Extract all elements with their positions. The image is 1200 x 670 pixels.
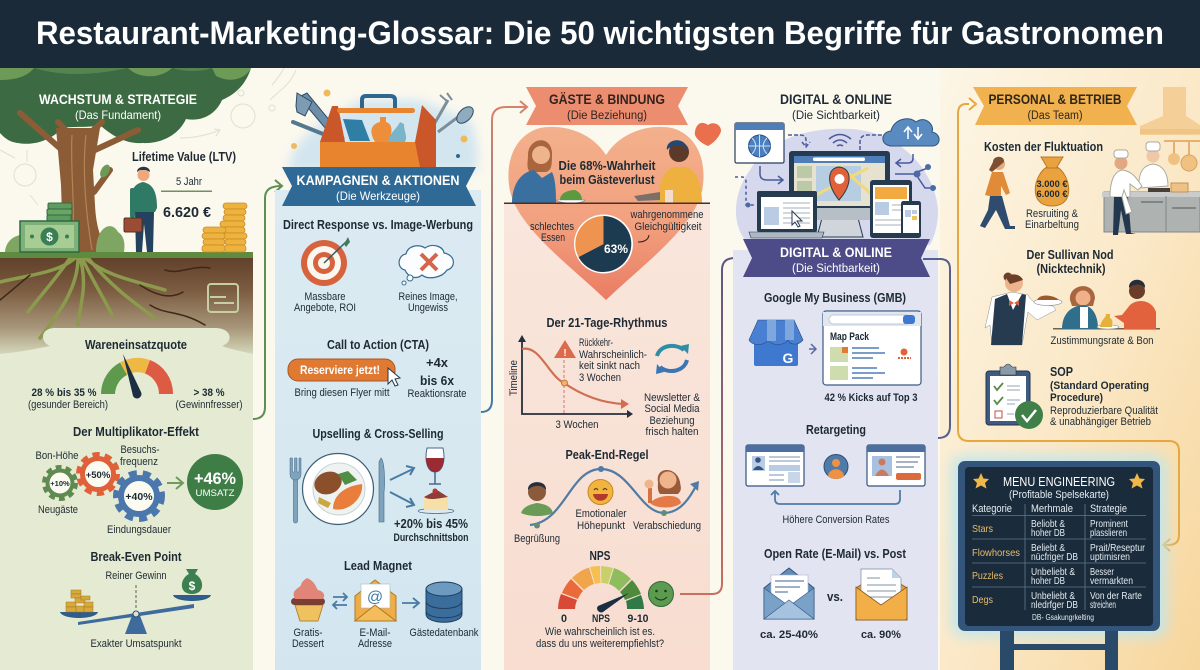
labels: gears: Neugäste [38, 504, 78, 516]
table header: Strategie [1090, 503, 1127, 515]
sign inner board [965, 467, 1153, 626]
heading: Direct Response: Direct Response vs. Image-Werbung [283, 217, 473, 232]
ground strip [0, 252, 253, 258]
heading: 21-Tage-Rhythmus: Der 21-Tage-Rhythmus [546, 315, 668, 330]
heading: Retargeting: Retargeting [806, 422, 866, 437]
text: newsletter: frisch halten [646, 426, 698, 438]
labels: Lead Magnet: E-Mail- [360, 627, 391, 639]
sign heading [1003, 474, 1115, 501]
arrow: Personal to Menu Engineering [958, 98, 1179, 551]
label: Reiner Gewinn: Reiner Gewinn [106, 570, 166, 582]
heading: Open Rate: Open Rate (E-Mail) vs. Post [764, 546, 907, 561]
row: Dogs: Von der Rarte [1090, 590, 1142, 602]
button: Reserviere jetzt: Reserviere jetzt! [300, 365, 380, 377]
stat: average check: +20% bis 45% [394, 516, 468, 531]
labels: Direct Response: Ungewiss [408, 302, 448, 314]
gear green: +10% [50, 479, 70, 488]
stat: reaction rate [408, 355, 466, 400]
text: recruiting: Resruiting & [1026, 208, 1079, 220]
icon: banknote stack [20, 203, 79, 252]
labels: peak end: Emotionaler [576, 508, 627, 520]
text: vs: vs. [827, 589, 843, 604]
heading: 68 percent truth: beim Gästeverlust [560, 172, 655, 187]
labels: NPS: dass du uns weiterempfiehlst? [536, 638, 664, 650]
heading: Sullivan Nod [1026, 247, 1114, 276]
text: return probability: Wahrscheinlich- [579, 349, 647, 361]
icon: browser globe [735, 123, 784, 163]
row: Puzzles: Puzzles [972, 570, 1003, 582]
arrow: Wachstum to Kampagnen [253, 180, 282, 419]
table header: Merhmale [1031, 503, 1073, 515]
banner: Gaeste [526, 87, 688, 125]
badge: plus 46 percent: UMSATZ [196, 488, 235, 499]
labels: pie chart [530, 209, 704, 244]
icon: recycling badge in soil [208, 284, 238, 312]
illustration: waiter with plate [985, 272, 1062, 345]
labels: NPS: 0 [561, 613, 567, 625]
row: Flowhorses [972, 542, 1145, 563]
labels: gears: Bon-Höhe [36, 450, 78, 462]
labels: gears: Besuchs- [120, 444, 160, 456]
table: menu matrix [972, 503, 1146, 611]
banner: Digital: (Die Sichtbarkeit) [792, 263, 880, 275]
text: SOP [1050, 364, 1158, 428]
icon: guest with briefcase [124, 167, 157, 252]
arrow: retargeting loop [771, 490, 900, 504]
warm background for team column [940, 68, 1200, 670]
text: Lifetime Value [132, 149, 236, 221]
banner: Personal: (Das Team) [1028, 110, 1083, 122]
banner: Kampagnen: (Die Werkzeuge) [336, 189, 420, 203]
labels: Lead Magnet: Gratis- [294, 627, 323, 639]
icon: balance scale [60, 569, 211, 634]
icon: email envelope: @ [367, 589, 383, 606]
labels: Wareneinsatzquote ranges: > 38 % [194, 387, 225, 399]
sign footnote: DB- Gsakungrkelting [1032, 613, 1094, 622]
labels: Lead Magnet [292, 627, 479, 650]
button: Reserviere jetzt [288, 359, 395, 381]
sign posts [1000, 631, 1118, 670]
icon: cupcake [291, 578, 325, 621]
labels: gears: Eindungsdauer [107, 524, 171, 536]
text: newsletter: Beziehung [650, 415, 694, 427]
banner: Gaeste: (Die Beziehung) [567, 110, 647, 122]
panel: Personal und Betrieb [973, 87, 1200, 429]
banner: Gaeste: GÄSTE & BINDUNG [549, 92, 665, 107]
gear blue: +40% [125, 491, 153, 503]
stat: reaction rate: Reaktionsrate [408, 388, 466, 400]
row: Flowhorses: Flowhorses [972, 547, 1020, 559]
text: Lifetime Value: Lifetime Value (LTV) [132, 149, 236, 164]
tree trunk [52, 128, 113, 254]
icon: laptop [749, 191, 824, 238]
trunk highlight lines [72, 135, 92, 250]
text: recruiting: Einarbeltung [1025, 219, 1079, 231]
arrow: to database [402, 598, 419, 608]
panel background [0, 345, 253, 670]
illustration: greeted guest [521, 482, 553, 516]
row: Dogs: nledrfger DB [1031, 599, 1078, 611]
text: newsletter [644, 392, 701, 438]
icon: cursor [388, 368, 400, 386]
row: Flowhorses: Prait/Reseptur [1090, 542, 1145, 554]
heading: Lead Magnet: Lead Magnet [344, 558, 413, 573]
icon: balance scale: $ [189, 579, 196, 593]
heading: 68 percent truth: Die 68%-Wahrheit [558, 158, 656, 173]
text: SOP: (Standard Operating [1050, 380, 1149, 392]
text: return probability: 3 Wochen [579, 372, 621, 384]
icon: green smiley [648, 582, 674, 606]
labels: peak end: Höhepunkt [577, 520, 625, 532]
table header: Kategorie [972, 503, 1012, 515]
sign glow [952, 456, 1166, 636]
labels: NPS: Wie wahrscheinlich ist es. [545, 626, 655, 638]
banner: Kampagnen: KAMPAGNEN & AKTIONEN [296, 172, 460, 188]
labels: Direct Response [294, 291, 458, 314]
labels: Direct Response: Angebote, ROI [294, 302, 356, 314]
illustration: woman at table [512, 140, 585, 203]
leaf on branch [98, 163, 112, 179]
labels: Direct Response: Reines Image, [398, 291, 458, 303]
banner: Personal: PERSONAL & BETRIEB [988, 92, 1122, 107]
badge: plus 46 percent: +46% [194, 469, 236, 488]
labels: open rates: ca. 90% [861, 629, 901, 641]
icon: banknote stack: $ [46, 230, 53, 244]
labels: pie chart: Essen [541, 232, 565, 244]
icon: database [426, 582, 462, 622]
network lines and wifi [735, 134, 935, 205]
heading: Call to Action: Call to Action (CTA) [327, 337, 429, 352]
icon: browser left [746, 445, 804, 486]
row: Stars: hoher DB [1031, 527, 1065, 539]
icon: blue envelope [764, 568, 814, 619]
title bar [0, 0, 1200, 68]
illustration: guests at table [1053, 280, 1160, 330]
row: Puzzles: Unbeliebt & [1031, 566, 1075, 578]
heading: Multiplikator-Effekt: Der Multiplikator-Effekt [73, 424, 200, 439]
icon: target [301, 237, 350, 286]
panel background [275, 190, 481, 670]
text: SOP: SOP [1050, 364, 1073, 379]
row: Dogs [972, 590, 1142, 611]
gauge: Wareneinsatzquote [101, 354, 173, 398]
labels: Lead Magnet: Adresse [358, 638, 392, 650]
icon: kitchen hood [1140, 87, 1200, 135]
pie chart [574, 214, 633, 274]
row: Flowhorses: uptimisren [1090, 551, 1130, 563]
text: newsletter: Newsletter & [644, 392, 701, 404]
row: Dogs: Degs [972, 594, 993, 606]
table header [972, 503, 1127, 515]
icon: money bag: 6.000 € [1036, 189, 1068, 199]
labels: open rates: ca. 25-40% [760, 629, 818, 641]
sign heading: (Profitable Spelsekarte) [1009, 489, 1109, 501]
labels: Wareneinsatzquote ranges: (Gewinnfresser) [176, 399, 242, 411]
icon: toolbox [291, 90, 476, 167]
labels: Wareneinsatzquote ranges [28, 387, 242, 411]
badge: plus 46 percent [187, 454, 243, 510]
heading: Fluktuation: Kosten der Fluktuation [984, 139, 1103, 154]
labels: Lead Magnet: Dessert [292, 638, 324, 650]
pie chart: 63% [604, 244, 628, 256]
text: SOP: Procedure) [1050, 392, 1103, 404]
row: Puzzles: hoher DB [1031, 575, 1065, 587]
icon: cloud sync [883, 119, 939, 146]
labels: NPS: 9-10 [628, 613, 648, 625]
text: recruiting [1025, 208, 1079, 231]
label: conversion: Höhere Conversion Rates [782, 514, 890, 526]
arrow: Kampagnen to Gaeste [481, 101, 527, 412]
card: Map Pack: Map Pack [830, 331, 870, 343]
text: newsletter: Social Media [644, 403, 700, 415]
heading blob: Wareneinsatzquote: Wareneinsatzquote [85, 337, 187, 352]
icon: tablet and phone [870, 180, 921, 238]
icon: orange envelope with letter [856, 569, 907, 620]
icon: plate with cutlery [290, 454, 385, 524]
heading: GMB: Google My Business (GMB) [764, 290, 906, 305]
illustration: leaving employee [980, 157, 1015, 229]
labels: peak end: Begrüßung [514, 533, 560, 545]
stat: reaction rate: +4x [426, 355, 449, 370]
labels: open rates [760, 629, 901, 641]
section heading: WACHSTUM & STRATEGIE [39, 91, 197, 107]
text: return probability [579, 337, 647, 384]
text: Lifetime Value: 6.620 € [163, 204, 212, 221]
chart: 21 day curve: ! [563, 348, 567, 359]
row: Dogs: streichen [1090, 599, 1116, 611]
heading: Upselling: Upselling & Cross-Selling [312, 426, 444, 441]
labels: Wareneinsatzquote ranges: (gesunder Bereich) [28, 399, 108, 411]
heading: Sullivan Nod: Der Sullivan Nod [1026, 247, 1114, 262]
card: Map Pack [823, 311, 921, 385]
heading: Digital top: DIGITAL & ONLINE [780, 92, 892, 107]
icon: refresh arrows [656, 344, 689, 374]
labels: NPS [536, 613, 664, 650]
stat: average check: Durchschnittsbon [394, 532, 469, 544]
table line [504, 202, 710, 204]
row: Flowhorses: Beliebt & [1031, 542, 1065, 554]
stat: reaction rate: bis 6x [420, 373, 455, 388]
arrow: to map pack [809, 344, 816, 354]
label: flyer: Bring diesen Flyer mitt [294, 387, 390, 399]
row: Puzzles [972, 566, 1133, 587]
banner: Personal [973, 87, 1137, 125]
section heading: (Das Fundament) [75, 108, 161, 122]
chart: peak end curve [530, 466, 699, 528]
text: return probability: Rückkehr- [579, 337, 613, 349]
labels: peak end [514, 508, 701, 545]
labels: Wareneinsatzquote ranges: 28 % bis 35 % [32, 387, 97, 399]
heading: Sullivan Nod: (Nicktechnik) [1036, 261, 1106, 276]
icon: stars [973, 473, 1145, 488]
labels: pie chart: Gleichgültigkeit [634, 221, 702, 233]
panel: Gaeste und Bindung [504, 87, 721, 670]
labels: Lead Magnet: Gästedatenbank [410, 627, 479, 639]
icon: thought cloud with cross [399, 246, 453, 285]
panel: Wachstum und Strategie [0, 68, 253, 670]
labels: peak end: Verabschiedung [633, 520, 701, 532]
arrow: Gaeste to Digital [680, 252, 746, 594]
arrow: Digital to Personal [923, 259, 950, 438]
row: Flowhorses: nücfriger DB [1031, 551, 1078, 563]
panel: Menu Engineering sign [952, 456, 1166, 670]
heading: Digital top [780, 92, 892, 122]
icon: wine glass [426, 448, 444, 484]
row: Dogs: Unbeliebt & [1031, 590, 1075, 602]
row: Stars [972, 518, 1128, 539]
arrows: exchange [333, 593, 347, 609]
row: Puzzles: vermarkten [1090, 575, 1133, 587]
illustration: man at table [634, 140, 702, 203]
section heading [39, 91, 197, 122]
icon: small heart [695, 123, 721, 146]
row: Stars: Stars [972, 523, 993, 535]
heading: Break-Even Point: Break-Even Point [90, 549, 182, 564]
label: Zustimmungsrate: Zustimmungsrate & Bon [1050, 335, 1154, 347]
row: Stars: Beliobt & [1031, 518, 1065, 530]
labels: gears [36, 444, 171, 536]
icon: email envelope [355, 580, 396, 621]
stat: 42 percent clicks: 42 % Kicks auf Top 3 [824, 392, 918, 404]
icon: Google store [749, 320, 803, 366]
icon: monitor with map [789, 151, 890, 237]
title bar: Restaurant-Marketing-Glossar: Die 50 wichtigsten Begriffe für Gastronomen [36, 15, 1164, 51]
chart: 21 day curve: Timeline [508, 360, 520, 396]
arrows: upsell [390, 466, 414, 507]
sign board [958, 461, 1160, 631]
icon: SOP clipboard [986, 364, 1043, 429]
panel background [504, 203, 710, 670]
banner: Digital: DIGITAL & ONLINE [780, 245, 892, 260]
row: Stars: plasslieren [1090, 527, 1127, 539]
heading: 68 percent truth [558, 158, 656, 187]
text: SOP: & unabhängiger Betrieb [1050, 416, 1151, 428]
text: Lifetime Value: 5 Jahr [176, 176, 202, 188]
icon: money bag: 3.000 € [1036, 179, 1068, 189]
panel background [733, 250, 938, 670]
icon: user circle [824, 454, 848, 479]
row: Puzzles: Besser [1090, 566, 1114, 578]
illustration: waving woman [644, 470, 681, 508]
banner: Kampagnen [282, 167, 476, 206]
label: 3 Wochen axis: 3 Wochen [556, 419, 598, 431]
heading: Digital top: (Die Sichtbarkeit) [792, 110, 880, 122]
labels: NPS: NPS [592, 613, 610, 625]
sign heading: MENU ENGINEERING [1003, 474, 1115, 489]
banner: Digital [743, 239, 930, 277]
icon: Google store: G [783, 350, 794, 366]
heading blob: Wareneinsatzquote [0, 328, 253, 360]
labels: pie chart: wahrgenommene [630, 209, 704, 221]
icon: money bag [1035, 157, 1069, 206]
panel: Digital und Online [733, 92, 939, 670]
icon: browser right [867, 445, 925, 486]
gears: Multiplikator-Effekt [45, 455, 162, 519]
icon: cake [418, 488, 454, 514]
label: Exakter Umsatspunkt: Exakter Umsatspunkt [90, 638, 182, 650]
labels: pie chart: schlechtes [530, 221, 574, 233]
heart [508, 127, 704, 300]
soil with roots [0, 256, 253, 356]
row: Stars: Prominent [1090, 518, 1128, 530]
device backdrop blob [736, 129, 938, 245]
heading: NPS: NPS [590, 548, 611, 563]
bush [5, 226, 124, 252]
text: SOP: Reproduzierbare Qualität [1050, 405, 1158, 417]
illustration: kitchen with chefs [1102, 141, 1200, 235]
heading: Peak-End-Regel: Peak-End-Regel [566, 447, 648, 462]
network nodes [746, 164, 936, 208]
icon: laughing smiley [588, 480, 613, 504]
chart: 21 day curve [508, 335, 633, 418]
labels: gears: frequenz [120, 456, 158, 468]
labels: Direct Response: Massbare [304, 291, 346, 303]
tree branches [20, 113, 138, 192]
panel: Kampagnen und Aktionen [275, 90, 481, 670]
toolbox backdrop [288, 100, 478, 172]
gear red: +50% [86, 470, 111, 481]
tree canopy [0, 68, 251, 144]
arrow to result [167, 477, 183, 489]
background doodles [0, 68, 296, 205]
icon: coin stacks [202, 203, 247, 252]
stat: average check [394, 516, 469, 544]
gauge: NPS [558, 566, 644, 612]
text: return probability: keit sinkt nach [579, 360, 640, 372]
